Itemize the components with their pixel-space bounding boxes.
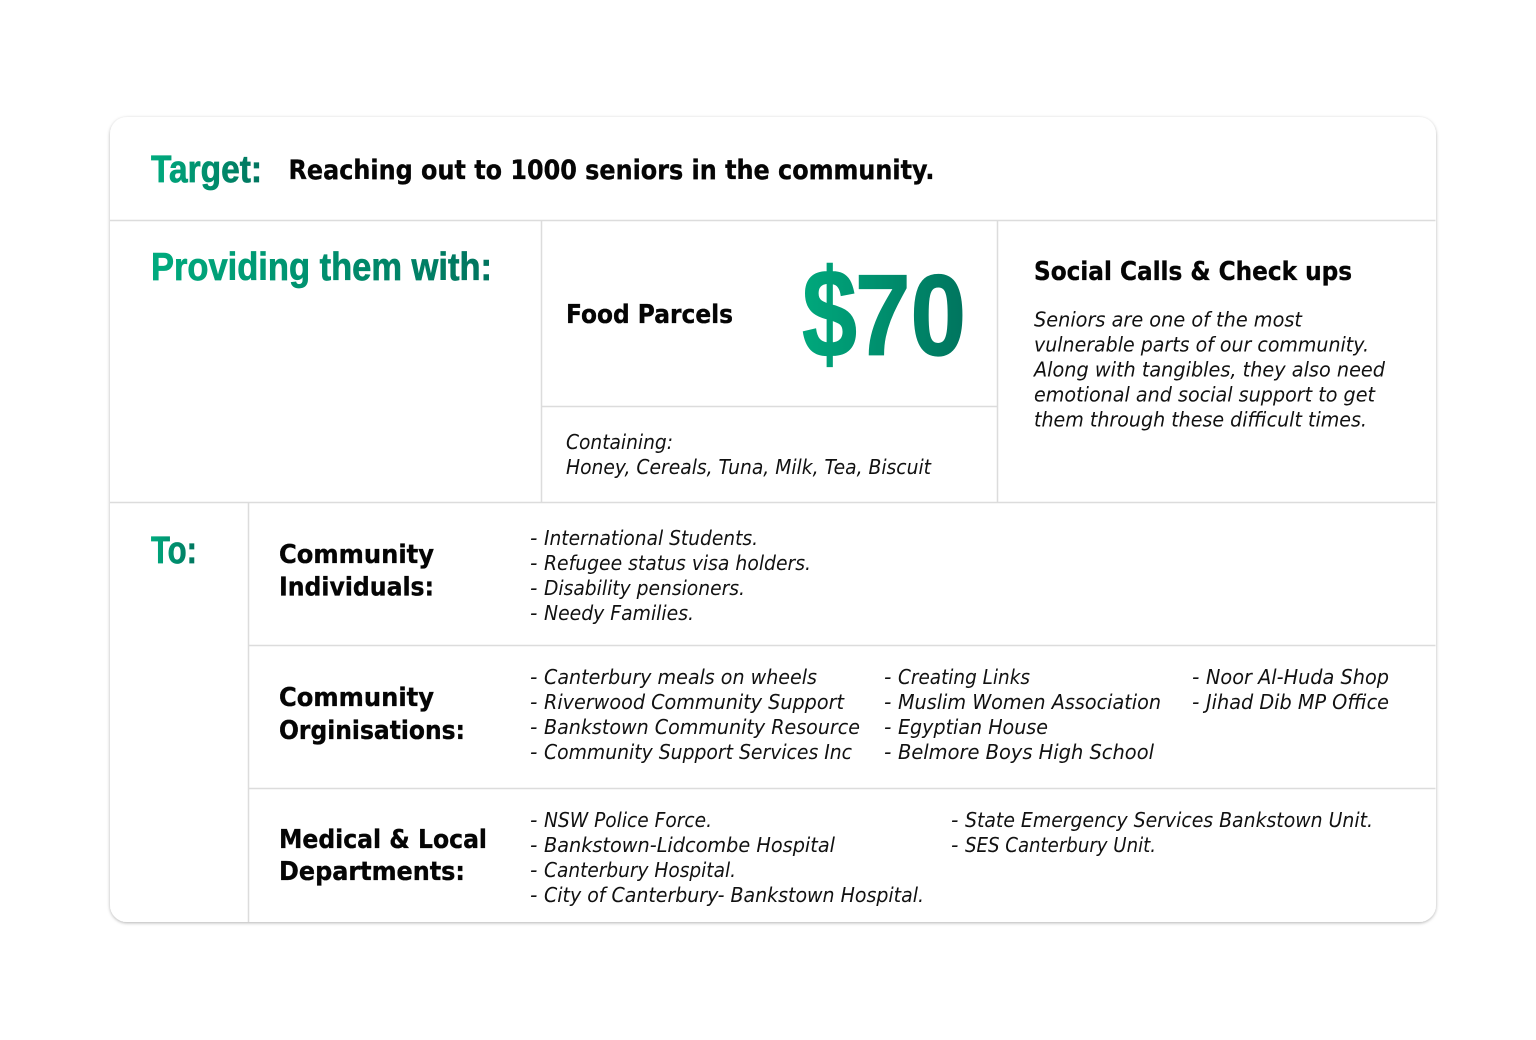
list: organisations column 2: Muslim Women Association [898,690,1161,714]
list: individuals [530,526,811,625]
list: organisations column 2: - [884,665,891,689]
list: medical column 2: - [951,833,958,857]
text: social calls description: Seniors are one of the most [1034,308,1303,332]
heading: Target: Target: [151,149,262,191]
label: Medical & Local Departments: Medical & Local [279,825,487,855]
text: parcel contents [566,430,932,479]
label: Community Orginisations: Community [279,683,434,713]
list: individuals: Disability pensioners. [544,576,745,600]
list: organisations column 1: - [530,715,537,739]
list: medical column 2: SES Canterbury Unit. [965,833,1156,857]
row: community organisations [279,665,1389,764]
list: organisations column 1: Riverwood Community Support [544,690,845,714]
text: social calls description [1032,308,1386,432]
label: Medical & Local Departments [279,825,487,887]
list: medical column 2: State Emergency Services Bankstown Unit. [965,808,1373,832]
heading: Providing them with: Providing them with: [151,246,492,289]
row: medical and local departments [279,808,1373,907]
label: Food Parcels: Food Parcels [566,300,733,330]
list: organisations column 2: Creating Links [898,665,1030,689]
list: organisations column 2: Egyptian House [898,715,1048,739]
list: individuals: - [530,526,537,550]
list: medical column 1: NSW Police Force. [544,808,712,832]
list: organisations column 1: - [530,665,537,689]
label: Community Individuals: Individuals: [279,572,434,602]
list: medical column 1: Bankstown-Lidcombe Hospital [544,833,835,857]
list: organisations column 1: Community Support Services Inc [544,740,852,764]
list: organisations column 1: Canterbury meals on wheels [544,665,817,689]
label: Community Orginisations: Orginisations: [279,716,465,746]
text: parcel contents: Containing: [566,430,673,454]
list: medical column 1: - [530,833,537,857]
heading: To: To: [151,530,197,572]
list: organisations column 2: - [884,715,891,739]
panel: main card [110,117,1436,922]
list: individuals: International Students. [544,526,758,550]
list: organisations column 1: Bankstown Community Resource [544,715,860,739]
label: Community Individuals: Community [279,540,434,570]
big number: $70: $ [802,243,857,384]
label: Medical & Local Departments: Departments: [279,857,465,887]
label: Community Orginisations [279,683,465,746]
list: organisations column 2: - [884,740,891,764]
list: medical column 1: - [530,808,537,832]
big number: $70 [802,243,966,384]
heading: Social Calls: Social Calls & Check ups [1034,257,1352,287]
list: organisations column 3: - [1192,690,1199,714]
table grid lines [110,220,1436,922]
list: individuals: Needy Families. [544,601,694,625]
list: organisations column 1: - [530,740,537,764]
list: medical column 1: City of Canterbury- Bankstown Hospital. [544,883,924,907]
list: organisations column 2: Belmore Boys High School [898,740,1154,764]
list: organisations column 3: Jihad Dib MP Office [1202,690,1389,714]
list: organisations column 2 [884,665,1161,764]
list: organisations column 3 [1192,665,1389,714]
row: community individuals [279,526,811,625]
list: individuals: - [530,551,537,575]
list: organisations column 3: Noor Al-Huda Shop [1206,665,1389,689]
text: parcel contents: Honey, Cereals, Tuna, Milk, Tea, Biscuit [566,455,932,479]
list: organisations column 2: - [884,690,891,714]
big number: $70: 70 [855,252,966,380]
list: medical column 1: Canterbury Hospital. [544,858,736,882]
list: organisations column 3: - [1192,665,1199,689]
list: medical column 1: - [530,858,537,882]
list: individuals: - [530,576,537,600]
list: medical column 1: - [530,883,537,907]
list: organisations column 1: - [530,690,537,714]
list: individuals: - [530,601,537,625]
text: social calls description: them through these difficult times. [1034,408,1367,432]
panel: food parcels [566,243,966,479]
list: medical column 2 [951,808,1373,857]
text: social calls description: emotional and social support to get [1034,382,1376,406]
list: medical column 2: - [951,808,958,832]
list: medical column 1 [530,808,924,907]
text: social calls description: Along with tangibles, they also need [1032,358,1386,382]
panel: social calls [1032,257,1386,432]
text: target statement: Reaching out to 1000 seniors in the community. [288,155,934,186]
list: organisations column 1 [530,665,860,764]
label: Community Individuals [279,540,434,602]
list: individuals: Refugee status visa holders. [544,551,811,575]
text: social calls description: vulnerable parts of our community. [1034,332,1369,356]
